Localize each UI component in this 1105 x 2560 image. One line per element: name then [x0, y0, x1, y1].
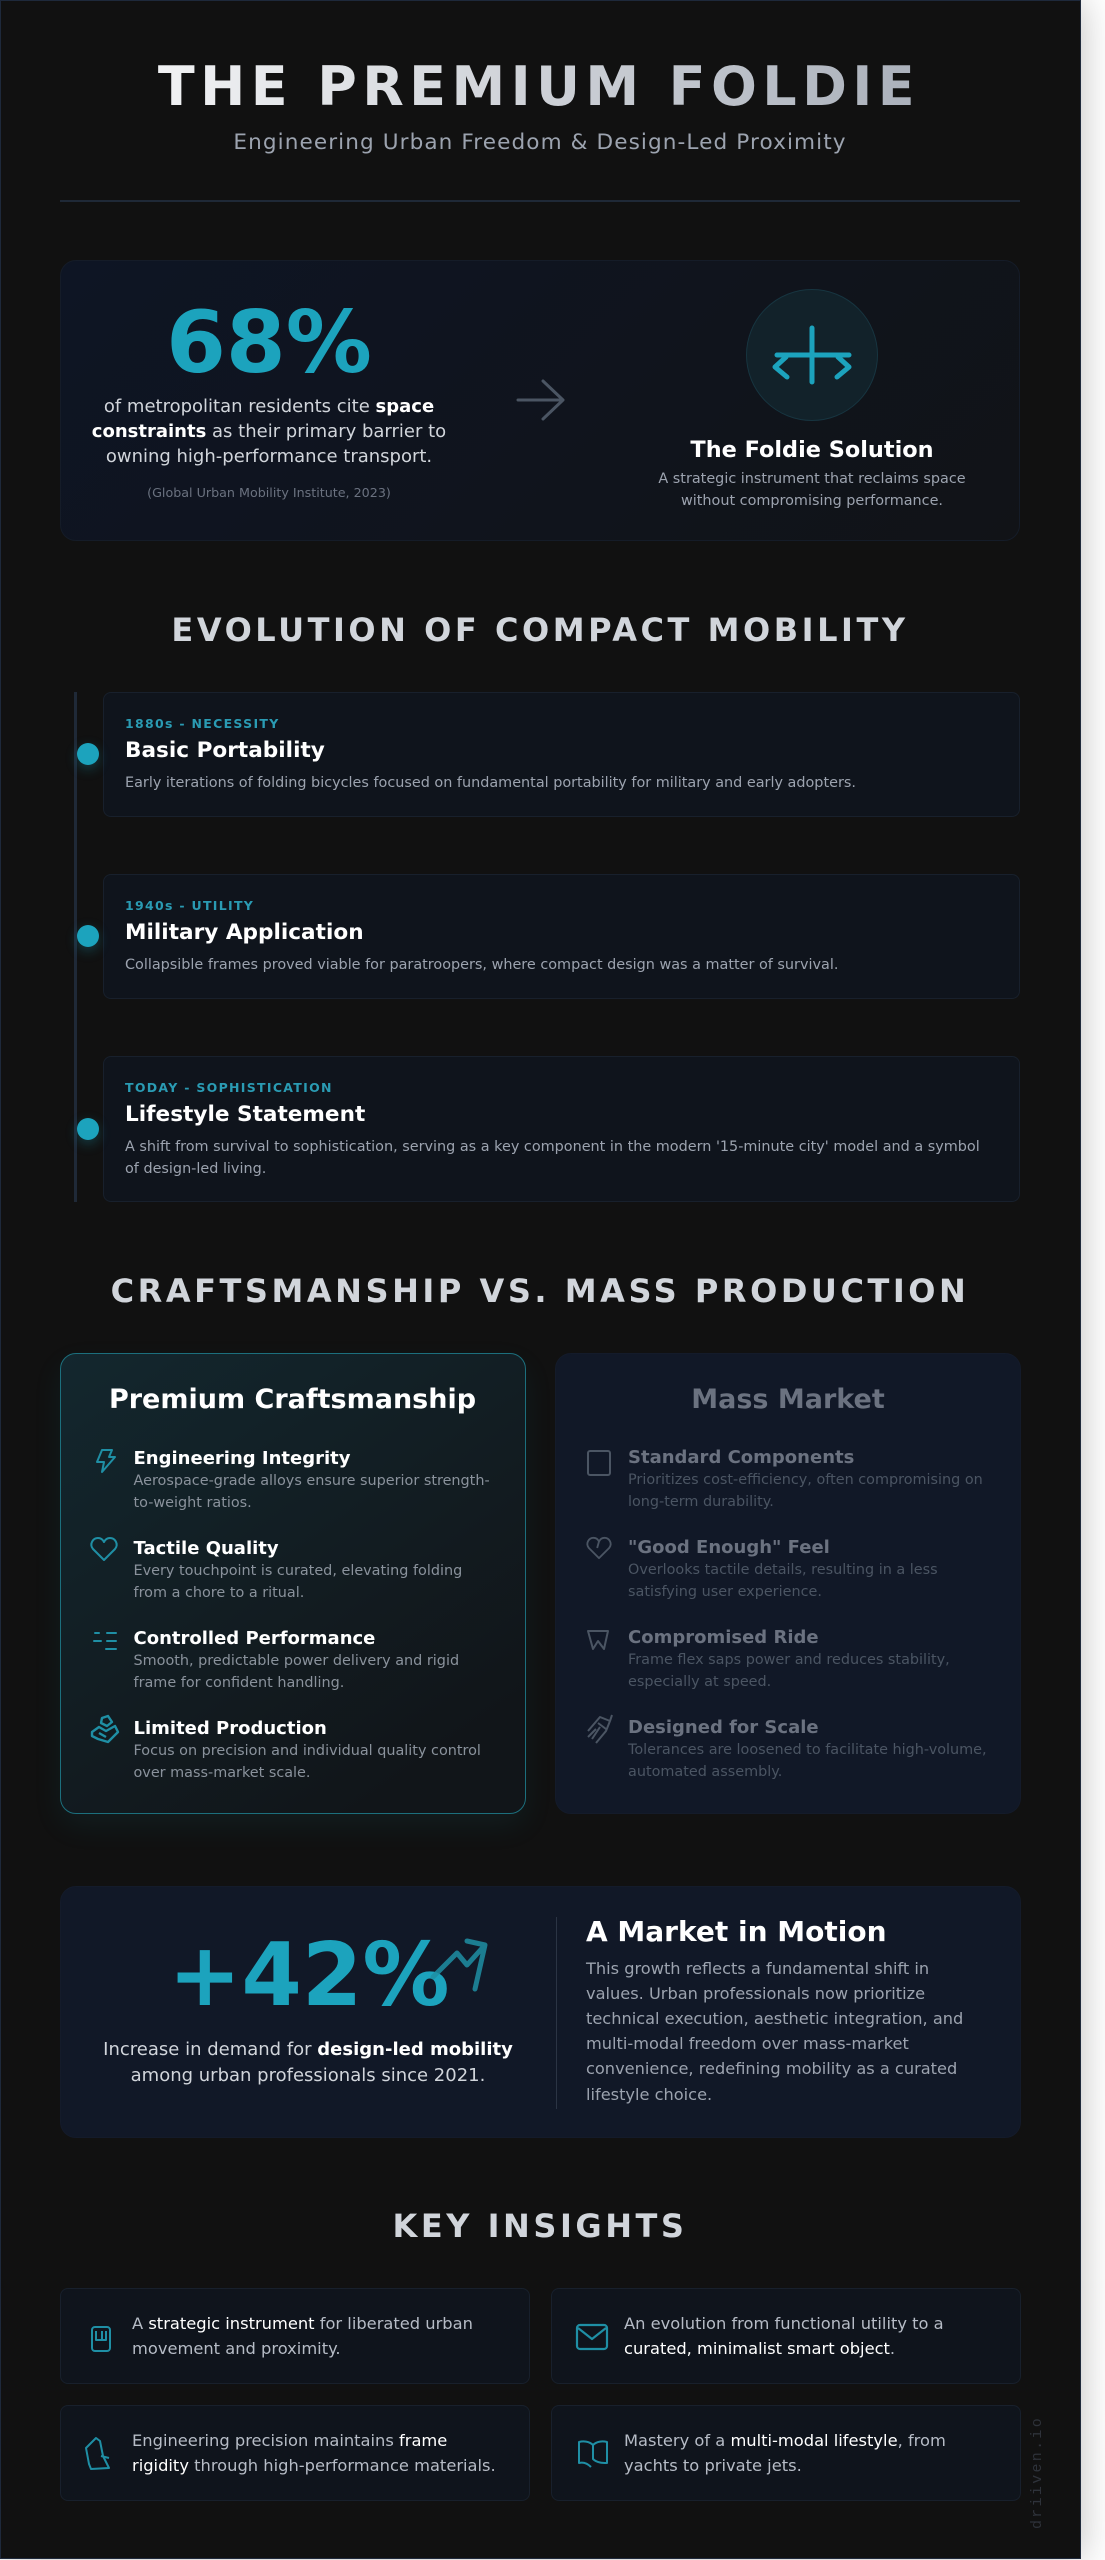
item 3 text: frame for confident handling. [134, 1675, 344, 1691]
item 4 [587, 1714, 987, 1780]
growth paragraph: values. Urban professionals now prioritize [586, 1984, 925, 2003]
growth paragraph: convenience, redefining mobility as a curated [586, 2059, 957, 2078]
item 3 title: Controlled Performance [134, 1628, 375, 1649]
item 4 text [134, 1743, 481, 1781]
icon: trending arrow [430, 1938, 488, 1992]
stat description: among urban professionals since 2021. [131, 2065, 485, 2086]
source citation: (Global Urban Mobility Institute, 2023) [147, 485, 391, 500]
item 3 text [134, 1653, 459, 1691]
item 1 text: Aerospace-grade alloys ensure superior strength- [134, 1473, 490, 1489]
timeline card 3 [103, 1056, 1020, 1202]
stat description: of metropolitan residents cite space [104, 396, 434, 417]
icon: assembly [587, 1714, 613, 1744]
item 4 text: Focus on precision and individual quality control [134, 1743, 481, 1759]
item 1 [587, 1447, 983, 1510]
era text 1: Early iterations of folding bicycles focused on fundamental portability for military and early adopters. [125, 775, 856, 791]
era label 1: 1880s - NECESSITY [125, 716, 280, 731]
item 1 text [134, 1473, 490, 1511]
panel heading: Premium Craftsmanship [109, 1384, 476, 1415]
item 4 text: automated assembly. [628, 1764, 782, 1780]
icon: lightning [96, 1449, 116, 1473]
item 4 title: Designed for Scale [628, 1717, 819, 1738]
insight text [624, 2430, 946, 2475]
stat description: Increase in demand for design-led mobility [103, 2039, 513, 2060]
item 4 text [628, 1742, 987, 1780]
panel: market growth [60, 1886, 1021, 2138]
item 3 title: Compromised Ride [628, 1627, 819, 1648]
stat description [92, 396, 446, 467]
item 1 title: Engineering Integrity [134, 1448, 351, 1469]
item 1 text: to-weight ratios. [134, 1495, 252, 1511]
item 4 [90, 1714, 481, 1781]
icon: envelope [576, 2324, 608, 2350]
era label 3: TODAY - SOPHISTICATION [125, 1080, 333, 1095]
item 2 [90, 1537, 462, 1601]
insight text: Engineering precision maintains frame [132, 2430, 447, 2450]
panel heading: Mass Market [691, 1384, 885, 1415]
insight text: yachts to private jets. [624, 2456, 802, 2475]
item 3 text [628, 1652, 950, 1690]
item 2 [586, 1536, 938, 1600]
item 4 title: Limited Production [134, 1718, 327, 1739]
solution text: without compromising performance. [681, 493, 943, 509]
stat description: constraints as their primary barrier to [92, 421, 446, 442]
title [1, 53, 1077, 121]
growth heading: A Market in Motion [586, 1915, 887, 1948]
stat description: owning high-performance transport. [106, 446, 432, 467]
icon: open book [578, 2440, 608, 2468]
icon: hand with package [90, 1714, 120, 1744]
item 3 [587, 1627, 950, 1690]
icon: heart outline [586, 1536, 612, 1559]
panel: hero statistic and solution [60, 260, 1020, 541]
era text 3: of design-led living. [125, 1161, 266, 1177]
icon: shield [587, 1630, 609, 1650]
insight text: An evolution from functional utility to a [624, 2314, 944, 2332]
panel: premium craftsmanship [60, 1353, 526, 1814]
heading: craftsmanship: CRAFTSMANSHIP VS. MASS PRODUCTION [111, 1272, 969, 1310]
era title 2: Military Application [125, 920, 364, 945]
big stat 68%: 68% [166, 293, 372, 393]
item 3 text: Smooth, predictable power delivery and rigid [134, 1653, 459, 1669]
node 1 [77, 743, 99, 765]
item 2 text: satisfying user experience. [628, 1584, 822, 1600]
heading: evolution: EVOLUTION OF COMPACT MOBILITY [171, 611, 909, 649]
era text 3 [125, 1139, 980, 1177]
icon: phone [91, 2326, 111, 2352]
insight card 4 [551, 2405, 1021, 2501]
item 1 text: long-term durability. [628, 1494, 774, 1510]
insight text: movement and proximity. [132, 2339, 341, 2358]
icon: heart [90, 1537, 118, 1561]
growth paragraph: multi-modal freedom over mass-market [586, 2034, 909, 2053]
stat description [103, 2039, 513, 2086]
item 2 text: Every touchpoint is curated, elevating folding [134, 1563, 462, 1579]
solution heading: The Foldie Solution [690, 437, 934, 463]
solution icon [746, 289, 878, 421]
era title 3: Lifestyle Statement [125, 1102, 365, 1127]
arrow [516, 379, 564, 420]
insight card 2 [551, 2288, 1021, 2384]
item 2 title: "Good Enough" Feel [628, 1537, 830, 1558]
insight text: rigidity through high-performance materials. [132, 2456, 496, 2475]
growth paragraph [586, 1958, 963, 2104]
timeline card 2 [103, 874, 1020, 999]
icon: sliders [93, 1632, 117, 1650]
insight card 1 [60, 2288, 530, 2384]
insight text: curated, minimalist smart object. [624, 2339, 895, 2358]
solution text: A strategic instrument that reclaims space [658, 471, 966, 487]
item 3 [93, 1628, 459, 1691]
item 1 [96, 1448, 490, 1511]
insight text [132, 2314, 473, 2358]
item 1 title: Standard Components [628, 1447, 854, 1468]
growth paragraph: lifestyle choice. [586, 2085, 712, 2104]
item 4 text: Tolerances are loosened to facilitate high-volume, [628, 1742, 987, 1758]
icon: frame [85, 2437, 110, 2470]
growth paragraph: technical execution, aesthetic integration, and [586, 2009, 963, 2028]
solution text [658, 471, 966, 509]
insight card 3 [60, 2405, 530, 2501]
insight text: Mastery of a multi-modal lifestyle, from [624, 2430, 946, 2450]
item 2 text: from a chore to a ritual. [134, 1585, 304, 1601]
era label 2: 1940s - UTILITY [125, 898, 254, 913]
item 2 title: Tactile Quality [134, 1538, 279, 1559]
item 4 text: over mass-market scale. [134, 1765, 310, 1781]
insight text [132, 2430, 496, 2475]
icon: square [587, 1450, 611, 1476]
panel: mass market [555, 1353, 1021, 1814]
era text 3: A shift from survival to sophistication, serving as a key component in the modern '15-minute city' model and a symbol [125, 1139, 980, 1155]
timeline card 1 [103, 692, 1020, 817]
item 2 text: Overlooks tactile details, resulting in a less [628, 1562, 938, 1578]
era title 1: Basic Portability [125, 738, 325, 763]
timeline [73, 692, 1020, 1202]
title: THE PREMIUM FOLDIE [158, 55, 920, 118]
growth paragraph: This growth reflects a fundamental shift in [586, 1958, 929, 1978]
item 3 text: Frame flex saps power and reduces stability, [628, 1652, 950, 1668]
insight text [624, 2314, 944, 2358]
item 3 text: especially at speed. [628, 1674, 771, 1690]
subtitle: Engineering Urban Freedom & Design-Led Proximity [233, 130, 847, 155]
watermark: driiven.io [1029, 2416, 1046, 2529]
era text 2: Collapsible frames proved viable for paratroopers, where compact design was a matter of survival. [125, 957, 838, 973]
heading: key insights: KEY INSIGHTS [392, 2207, 688, 2245]
item 1 text: Prioritizes cost-efficiency, often compromising on [628, 1472, 983, 1488]
insight text: A strategic instrument for liberated urban [132, 2314, 473, 2332]
item 2 text [628, 1562, 938, 1600]
item 1 text [628, 1472, 983, 1510]
item 2 text [134, 1563, 462, 1601]
big stat +42%: +42% [168, 1924, 450, 2026]
node 3 [77, 1118, 99, 1140]
node 2 [77, 925, 99, 947]
